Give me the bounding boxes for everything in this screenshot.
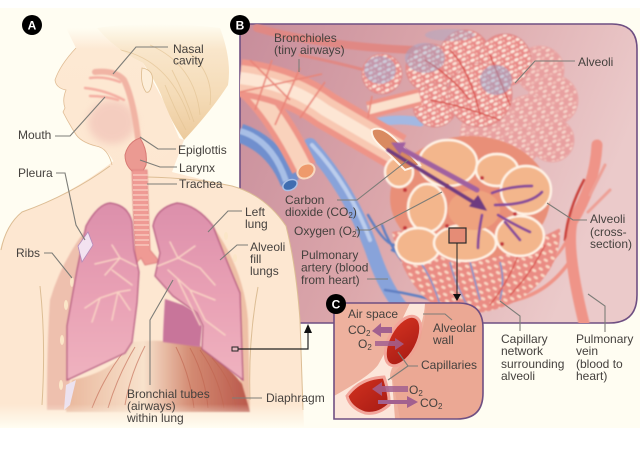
leader lines — [44, 47, 605, 398]
labels: panel C: Air space — [348, 307, 398, 321]
rib spots — [59, 232, 247, 390]
labels: panel C: 2 — [366, 329, 371, 338]
capillary network — [392, 228, 560, 313]
purple air arrows — [388, 143, 542, 248]
labels: panel A: Alveoli — [250, 240, 285, 254]
badge B — [230, 15, 250, 35]
labels: panel C: Alveolar — [433, 321, 476, 335]
labels: panel A: Pleura — [18, 166, 53, 180]
shaded air sac — [392, 303, 483, 419]
badge A — [22, 15, 42, 35]
lower capillary — [347, 377, 389, 413]
labels: panel C: 2 — [438, 402, 443, 411]
labels: below panel B: (blood to — [576, 357, 623, 371]
labels: panel C: 2 — [418, 389, 423, 398]
labels: panel B: artery (blood — [301, 260, 368, 274]
labels: panel C: Capillaries — [421, 358, 477, 372]
labels: panel B: 2 — [352, 230, 357, 239]
labels: panel B: ) — [353, 205, 357, 219]
lower pleura sliver — [64, 380, 76, 410]
badge B: B — [236, 18, 245, 32]
labels: below panel B: alveoli — [501, 369, 535, 383]
torso and shoulders — [0, 120, 304, 428]
labels: panel B: Alveoli — [578, 55, 613, 69]
labels: panel A: Diaphragm — [266, 391, 325, 405]
badge A: A — [28, 18, 37, 32]
panel B: alveoli close-up — [240, 24, 637, 323]
head and face — [55, 28, 180, 178]
hair — [97, 24, 229, 140]
face outline — [55, 48, 112, 165]
bronchiole opening — [296, 162, 316, 180]
bottom fade — [0, 404, 320, 428]
panel C: air sacs and capillaries — [334, 303, 483, 419]
trachea — [132, 170, 160, 265]
right lung (viewer side) — [153, 203, 243, 380]
labels: panel C: CO — [420, 396, 438, 410]
labels: below panel B: Capillary — [501, 332, 548, 346]
diaphragm muscle striations — [92, 346, 236, 408]
tube opening into cross-section — [372, 129, 420, 170]
inset locator square — [449, 228, 466, 243]
labels: panel A: Left — [245, 205, 266, 219]
labels: panel A: Epiglottis — [178, 143, 227, 157]
labels: panel A — [16, 42, 325, 425]
trachea rings — [133, 175, 149, 245]
left lung (viewer side) — [67, 203, 139, 380]
labels: below panel B: heart) — [576, 369, 607, 383]
labels: below panel B: surrounding — [501, 357, 564, 371]
labels: panel B: Oxygen (O — [294, 224, 352, 238]
larynx — [125, 138, 146, 171]
labels: panel A: Trachea — [179, 177, 223, 191]
labels: panel A: Larynx — [179, 161, 215, 175]
labels: panel A: lungs — [250, 264, 279, 278]
nasal cavity and mouth airway — [85, 72, 138, 138]
labels: below panel B: network — [501, 344, 544, 358]
labels: panel B: from heart) — [301, 273, 360, 287]
shoulder contour — [1, 166, 303, 410]
labels: panel B: Bronchioles — [274, 31, 337, 45]
labels: panel B: Pulmonary — [301, 248, 358, 262]
throat shadow — [88, 100, 136, 144]
labels: panel C: O — [409, 383, 418, 397]
labels: panel B: section) — [590, 237, 632, 251]
labels: panel A: (airways) — [127, 399, 176, 413]
pulmonary vein branches — [257, 28, 610, 323]
bronchial tree — [85, 242, 225, 335]
labels: panel B: 2 — [348, 211, 353, 220]
labels: panel C: CO — [348, 323, 366, 337]
labels: panel A: Ribs — [16, 246, 40, 260]
labels: below panel B: Pulmonary — [576, 332, 633, 346]
labels: panel C: wall — [432, 333, 454, 347]
alveolar wall band — [334, 303, 425, 419]
alveoli cluster — [362, 29, 578, 165]
labels: panel C: O — [358, 337, 367, 351]
arrows in inset — [372, 323, 418, 408]
badge C: C — [332, 298, 341, 312]
lower lobe shadow — [163, 299, 202, 347]
labels: panel A: fill — [250, 252, 261, 266]
labels: panel A: Bronchial tubes — [127, 387, 210, 401]
labels: panel B: dioxide (CO — [285, 205, 348, 219]
ribs right — [206, 228, 250, 410]
labels: panel C — [348, 307, 477, 411]
labels: panel C: 2 — [367, 343, 372, 352]
ribs left — [47, 232, 84, 410]
cross-section of alveoli — [385, 136, 551, 264]
labels: below panel B: vein — [576, 344, 598, 358]
panel A: human figure — [0, 24, 320, 428]
labels: panel A: Nasal — [173, 42, 204, 56]
badge C — [326, 294, 346, 314]
panel C border — [334, 303, 483, 419]
diaphragm — [66, 341, 250, 412]
pleura — [78, 232, 93, 262]
blue pulmonary artery — [240, 115, 430, 302]
labels: below panel B — [501, 332, 633, 383]
ear — [142, 68, 153, 92]
labels: panel B: Carbon — [285, 193, 324, 207]
blue vessel opening — [282, 178, 298, 192]
labels: panel A: Mouth — [18, 128, 51, 142]
labels: panel A: cavity — [173, 54, 204, 68]
labels: panel B: ) — [356, 224, 360, 238]
labels: panel B — [274, 31, 632, 287]
labels: panel B: (cross- — [590, 225, 627, 239]
labels: panel B: (tiny airways) — [274, 43, 345, 57]
labels: panel A: lung — [245, 217, 268, 231]
arrow: alveolus square to panel C — [453, 243, 461, 301]
arrow: lung locator to panel C — [232, 324, 312, 351]
bronchiole tubes — [240, 60, 420, 168]
upper capillary — [384, 314, 422, 367]
hair strands — [120, 45, 211, 130]
labels: panel A: within lung — [126, 411, 184, 425]
labels: panel B: Alveoli — [590, 212, 625, 226]
